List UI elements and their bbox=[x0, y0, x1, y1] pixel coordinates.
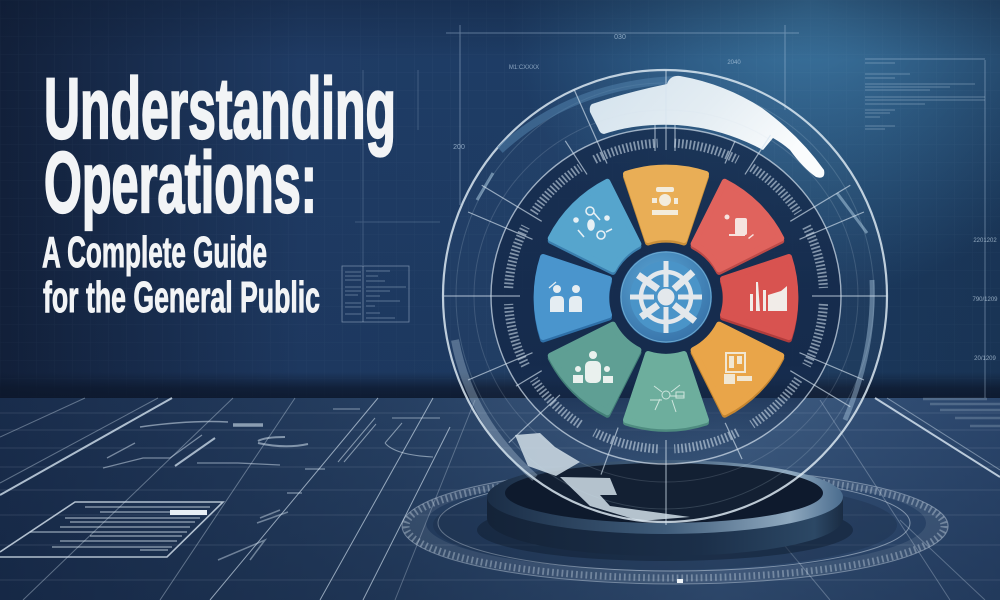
icon: gear bbox=[630, 261, 702, 333]
wedge: lower left teal bbox=[546, 309, 654, 419]
sphere glare highlight bbox=[590, 76, 824, 178]
floor blueprint lines bbox=[0, 398, 1000, 600]
icon: two people on left wedge bbox=[549, 282, 582, 312]
reflection in lower sphere bbox=[515, 433, 690, 521]
heading line: Understanding: Understanding bbox=[44, 61, 396, 157]
tick ring segments bbox=[505, 140, 827, 452]
wedge: upper left blue bbox=[546, 177, 654, 287]
floor schedule table bbox=[0, 502, 223, 557]
hub with gear bbox=[620, 251, 712, 343]
text block: top right notes bbox=[865, 63, 985, 129]
wedge: upper right red bbox=[678, 177, 786, 287]
small data table panel bbox=[342, 266, 409, 322]
icon: network on bottom wedge bbox=[650, 385, 684, 412]
wall blueprint annotations: 030 bbox=[614, 34, 626, 41]
wall blueprint annotations: M1:CXXXX bbox=[509, 65, 539, 71]
icon: factory on right wedge bbox=[750, 282, 787, 311]
icon: product on upper right wedge bbox=[724, 214, 754, 239]
wedge: top orange bbox=[626, 168, 706, 242]
wedge: left blue bbox=[537, 257, 609, 340]
wall blueprint annotations bbox=[355, 25, 998, 398]
wedge: lower right orange bbox=[678, 309, 786, 419]
wall blueprint annotations: 200 bbox=[453, 144, 465, 151]
pedestal ring base bbox=[477, 460, 853, 561]
subheading line: A Complete Guide: A Complete Guide bbox=[42, 228, 267, 277]
title bbox=[42, 61, 396, 322]
wall blueprint annotations: 2201202 bbox=[973, 238, 997, 244]
glass sphere bbox=[443, 70, 887, 522]
wall blueprint annotations: 790/1209 bbox=[972, 297, 998, 303]
radial guide lines bbox=[444, 70, 887, 525]
icon: dashboard on lower right wedge bbox=[724, 353, 752, 384]
heading line: Operations: Operations: bbox=[44, 135, 317, 231]
wedge: bottom teal bbox=[626, 354, 706, 429]
segmented wheel bbox=[537, 168, 795, 429]
icon: machine on top wedge bbox=[652, 187, 678, 215]
subheading line: for the General Public: for the General Public bbox=[43, 273, 320, 322]
wall blueprint annotations: 2040 bbox=[727, 60, 741, 66]
background wall bbox=[0, 0, 1000, 400]
wall blueprint annotations: 20/1209 bbox=[974, 356, 996, 362]
icon: process on upper left wedge bbox=[574, 207, 612, 239]
floor bbox=[0, 398, 1000, 600]
icon: team on lower left wedge bbox=[573, 351, 613, 383]
gauge ring on floor bbox=[402, 468, 949, 584]
wedge: right red bbox=[723, 257, 795, 340]
measurement dial rings bbox=[444, 70, 887, 525]
